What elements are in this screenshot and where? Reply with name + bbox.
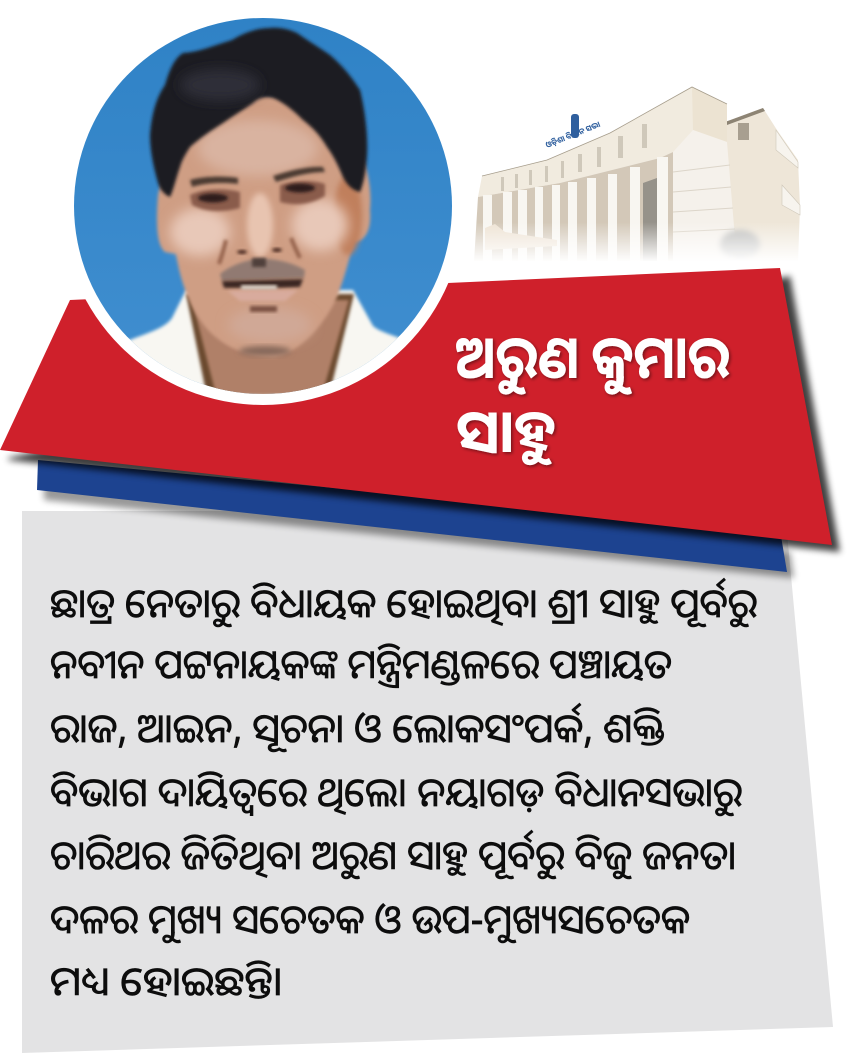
colonnade interior	[474, 152, 673, 262]
face side warmth	[334, 175, 362, 255]
face highlights	[198, 120, 318, 176]
moustache	[220, 259, 305, 281]
building emblem: ଓଡ଼ିଶା ବିଧାନ ସଭା	[544, 119, 602, 151]
building main facade	[478, 87, 727, 197]
entablature windows	[501, 124, 647, 191]
portrait photo	[62, 7, 464, 405]
columns	[483, 157, 668, 262]
body text block: ରାଜ, ଆଇନ, ସୂଚନା ଓ ଲୋକସଂପର୍କ, ଶକ୍ତି	[50, 699, 665, 754]
name line 2: ସାହୁ	[456, 388, 556, 470]
building side wing	[725, 108, 800, 262]
photo white frame	[62, 7, 464, 405]
body text block: ଦଳର ମୁଖ୍ୟ ସଚେତକ ଓ ଉପ-ମୁଖ୍ୟସଚେତକ	[50, 890, 690, 945]
photo background	[70, 15, 460, 400]
column block	[673, 130, 737, 262]
body text block	[50, 574, 757, 1007]
eyebrows	[190, 177, 238, 187]
mouth	[222, 279, 303, 288]
building illustration	[465, 87, 810, 273]
hair	[150, 28, 367, 197]
body text block: ଛାତ୍ର ନେତାରୁ ବିଧାୟକ ହୋଇଥିବା ଶ୍ରୀ ସାହୁ ପୂର୍ବରୁ	[50, 574, 757, 629]
name heading	[455, 314, 730, 470]
panel: grey text background	[22, 511, 833, 1053]
blue ribbon	[37, 460, 794, 578]
eye shadow	[190, 189, 240, 211]
red banner	[0, 268, 840, 552]
nose	[237, 250, 247, 254]
portico	[485, 224, 557, 250]
neck	[192, 300, 349, 395]
eyes	[198, 194, 228, 202]
shirt	[128, 288, 400, 394]
chin shade	[239, 346, 291, 356]
name line 1: ଅରୁଣ କୁମାର	[455, 314, 730, 396]
building ground fade	[465, 222, 810, 262]
body text block: ଚାରିଥର ଜିତିଥିବା ଅରୁଣ ସାହୁ ପୂର୍ବରୁ ବିଜୁ ଜନତା	[50, 826, 736, 881]
body text block: ମଧ୍ୟ ହୋଇଛନ୍ତି।	[50, 952, 283, 1007]
body text block: ବିଭାଗ ଦାୟିତ୍ୱରେ ଥିଲେ। ନୟାଗଡ଼ ବିଧାନସଭାରୁ	[50, 763, 742, 818]
face	[157, 94, 371, 357]
body text block: ନବୀନ ପଟ୍ଟନାୟକଙ୍କ ମନ୍ତ୍ରିମଣ୍ଡଳରେ ପଞ୍ଚାୟତ	[50, 635, 672, 690]
collar edges	[186, 294, 354, 392]
tree	[720, 230, 760, 260]
hair sheen	[180, 69, 260, 101]
